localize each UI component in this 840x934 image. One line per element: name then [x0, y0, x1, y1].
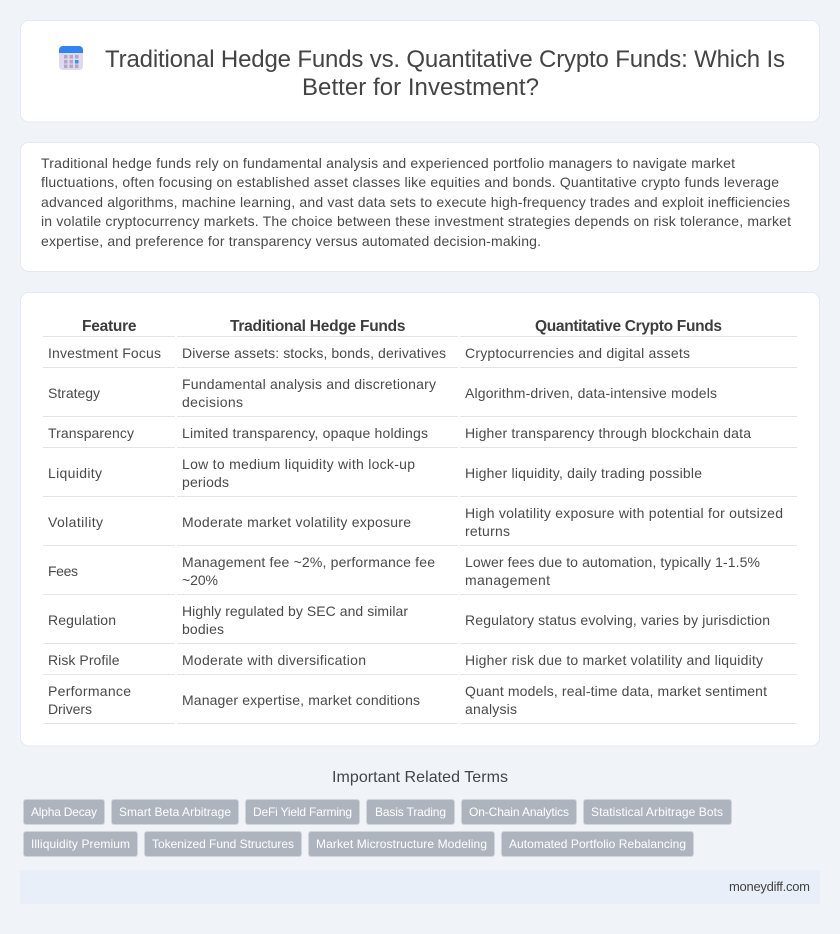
row: strategy: decisions	[182, 394, 243, 410]
tag: Alpha Decay	[24, 800, 104, 824]
text block: description: fluctuations, often focusing on established asset classes like equities and bonds. Quantitative crypto funds leverage	[41, 174, 779, 190]
row: volatility: Moderate market volatility exposure	[182, 514, 411, 530]
panel: description	[20, 142, 820, 272]
tag: Basis Trading	[366, 800, 454, 824]
table rules	[43, 336, 797, 724]
row: performance drivers: Manager expertise, market conditions	[182, 692, 420, 708]
row: fees: Lower fees due to automation, typically 1-1.5%	[465, 554, 760, 570]
panel: title card	[20, 20, 820, 122]
tags: related terms	[24, 800, 732, 856]
text block: description: Traditional hedge funds rely on fundamental analysis and experienced portfolio managers to navigate market	[41, 155, 735, 171]
row: transparency: Higher transparency through blockchain data	[465, 425, 751, 441]
row: transparency	[48, 425, 751, 441]
row: liquidity: Liquidity	[48, 465, 102, 481]
panel: comparison table	[20, 292, 820, 746]
row: investment focus	[48, 345, 690, 361]
tag: On-Chain Analytics	[462, 800, 576, 824]
table header	[82, 318, 722, 335]
title: Better for Investment?	[302, 74, 539, 101]
row: performance drivers: Drivers	[48, 701, 92, 717]
row: volatility: Volatility	[48, 514, 103, 530]
row: fees: management	[465, 572, 550, 588]
footer	[20, 870, 820, 904]
tag: Alpha Decay: Alpha Decay	[31, 805, 97, 819]
row: performance drivers	[48, 683, 767, 717]
row: performance drivers: Performance	[48, 683, 131, 699]
tag: Market Microstructure Modeling: Market Microstructure Modeling	[316, 837, 487, 851]
row: transparency: Transparency	[48, 425, 134, 441]
row: fees: ~20%	[182, 572, 218, 588]
tag: Illiquidity Premium: Illiquidity Premium	[31, 837, 130, 851]
table header: Traditional Hedge Funds	[230, 318, 406, 335]
row: liquidity: periods	[182, 474, 229, 490]
footer: moneydiff.com	[729, 879, 810, 894]
row: performance drivers: analysis	[465, 701, 517, 717]
row: regulation: Highly regulated by SEC and similar	[182, 603, 408, 619]
row: investment focus: Cryptocurrencies and digital assets	[465, 345, 690, 361]
row: volatility	[48, 505, 783, 539]
tag: Statistical Arbitrage Bots	[584, 800, 732, 824]
row: fees: Fees	[48, 563, 78, 579]
row: volatility: returns	[465, 523, 510, 539]
tag: Automated Portfolio Rebalancing	[502, 832, 694, 856]
row: regulation: Regulatory status evolving, varies by jurisdiction	[465, 612, 770, 628]
title: Traditional Hedge Funds vs. Quantitative Crypto Funds: Which Is	[105, 46, 785, 73]
table header: Quantitative Crypto Funds	[535, 318, 722, 335]
tag: On-Chain Analytics: On-Chain Analytics	[469, 805, 569, 819]
row: regulation: bodies	[182, 621, 224, 637]
text block: description: expertise, and preference for transparency versus automated decision-making.	[41, 233, 541, 249]
row: regulation	[48, 603, 770, 637]
title	[105, 46, 785, 101]
tag: DeFi Yield Farming: DeFi Yield Farming	[253, 805, 352, 819]
icon: calendar grid	[59, 46, 83, 70]
row: strategy: Algorithm-driven, data-intensive models	[465, 385, 717, 401]
tag: Market Microstructure Modeling	[308, 832, 494, 856]
row: investment focus: Diverse assets: stocks, bonds, derivatives	[182, 345, 446, 361]
row: risk profile: Higher risk due to market volatility and liquidity	[465, 652, 763, 668]
tag: Smart Beta Arbitrage: Smart Beta Arbitrage	[119, 805, 231, 819]
row: fees	[48, 554, 760, 588]
row: risk profile	[48, 652, 763, 668]
tag: Tokenized Fund Structures	[144, 832, 302, 856]
table header: Feature	[82, 318, 137, 335]
row: volatility: High volatility exposure with potential for outsized	[465, 505, 783, 521]
row: fees: Management fee ~2%, performance fee	[182, 554, 435, 570]
tag: DeFi Yield Farming	[246, 800, 360, 824]
row: performance drivers: Quant models, real-time data, market sentiment	[465, 683, 767, 699]
row: liquidity	[48, 456, 702, 490]
row: liquidity: Low to medium liquidity with lock-up	[182, 456, 415, 472]
row: risk profile: Risk Profile	[48, 652, 120, 668]
tag: Basis Trading: Basis Trading	[375, 805, 446, 819]
heading: related terms: Important Related Terms	[332, 769, 508, 786]
row: liquidity: Higher liquidity, daily trading possible	[465, 465, 702, 481]
row: risk profile: Moderate with diversification	[182, 652, 366, 668]
row: strategy	[48, 376, 717, 410]
row: strategy: Strategy	[48, 385, 100, 401]
row: strategy: Fundamental analysis and discretionary	[182, 376, 436, 392]
row: investment focus: Investment Focus	[48, 345, 161, 361]
tag: Tokenized Fund Structures: Tokenized Fund Structures	[152, 837, 294, 851]
tag: Automated Portfolio Rebalancing: Automated Portfolio Rebalancing	[509, 837, 686, 851]
tag: Smart Beta Arbitrage	[112, 800, 238, 824]
row: regulation: Regulation	[48, 612, 116, 628]
tag: Illiquidity Premium	[24, 832, 138, 856]
text block: description	[41, 155, 791, 249]
row: transparency: Limited transparency, opaque holdings	[182, 425, 428, 441]
text block: description: advanced algorithms, machine learning, and vast data sets to execute high-frequency trades and exploit inefficiencies	[41, 194, 790, 210]
text block: description: in volatile cryptocurrency markets. The choice between these investment strategies depends on risk tolerance, market	[41, 213, 791, 229]
tag: Statistical Arbitrage Bots: Statistical Arbitrage Bots	[591, 805, 723, 819]
